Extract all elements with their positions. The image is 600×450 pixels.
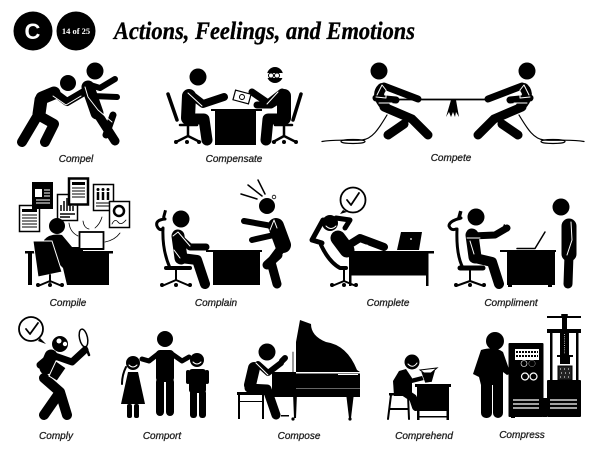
label: Compel	[59, 154, 94, 165]
panel: compose	[237, 320, 360, 442]
panel: complete	[312, 188, 434, 309]
panel: compress	[473, 314, 581, 441]
panel: comply	[19, 317, 89, 442]
panel: compete	[322, 62, 584, 164]
badge: letter C	[14, 12, 52, 50]
label: Comprehend	[395, 431, 453, 442]
icon: complaining across a desk	[157, 180, 283, 287]
badge: 14 of 25	[56, 12, 96, 50]
label: Complete	[367, 298, 410, 309]
title: Actions, Feelings, and Emotions	[112, 18, 415, 45]
label: Compete	[431, 153, 472, 164]
icon: handing money across a desk	[168, 67, 301, 145]
panel: comprehend	[388, 354, 453, 442]
icon: complimenting a colleague	[449, 198, 572, 287]
panel: compensate	[168, 67, 301, 165]
badge: letter C: C	[25, 19, 41, 44]
icon: relaxing at desk with check mark	[312, 188, 434, 287]
panel: complain	[157, 180, 283, 309]
panel: compile	[20, 178, 130, 309]
panel: comport	[121, 331, 207, 442]
label: Complain	[195, 298, 238, 309]
icon: two figures pushing	[22, 62, 117, 142]
label: Compile	[50, 298, 87, 309]
label: Compensate	[206, 154, 263, 165]
panel: compel	[22, 62, 117, 165]
icon: inspector with magnifying glass	[19, 317, 89, 415]
label: Compliment	[484, 298, 539, 309]
icon: reading a book at a desk	[388, 354, 451, 420]
badge: 14 of 25: 14 of 25	[62, 26, 90, 36]
panel: compliment	[449, 198, 572, 309]
icon: operating a compression press machine	[473, 314, 581, 418]
label: Compress	[499, 430, 545, 441]
icon: compiling documents at a laptop	[20, 178, 130, 287]
label: Compose	[278, 431, 321, 442]
label: Comply	[39, 431, 74, 442]
icon: pianist at grand piano	[237, 320, 360, 421]
label: Comport	[143, 431, 182, 442]
icon: tug of war	[322, 62, 584, 144]
icon: adult with two children	[121, 331, 207, 418]
